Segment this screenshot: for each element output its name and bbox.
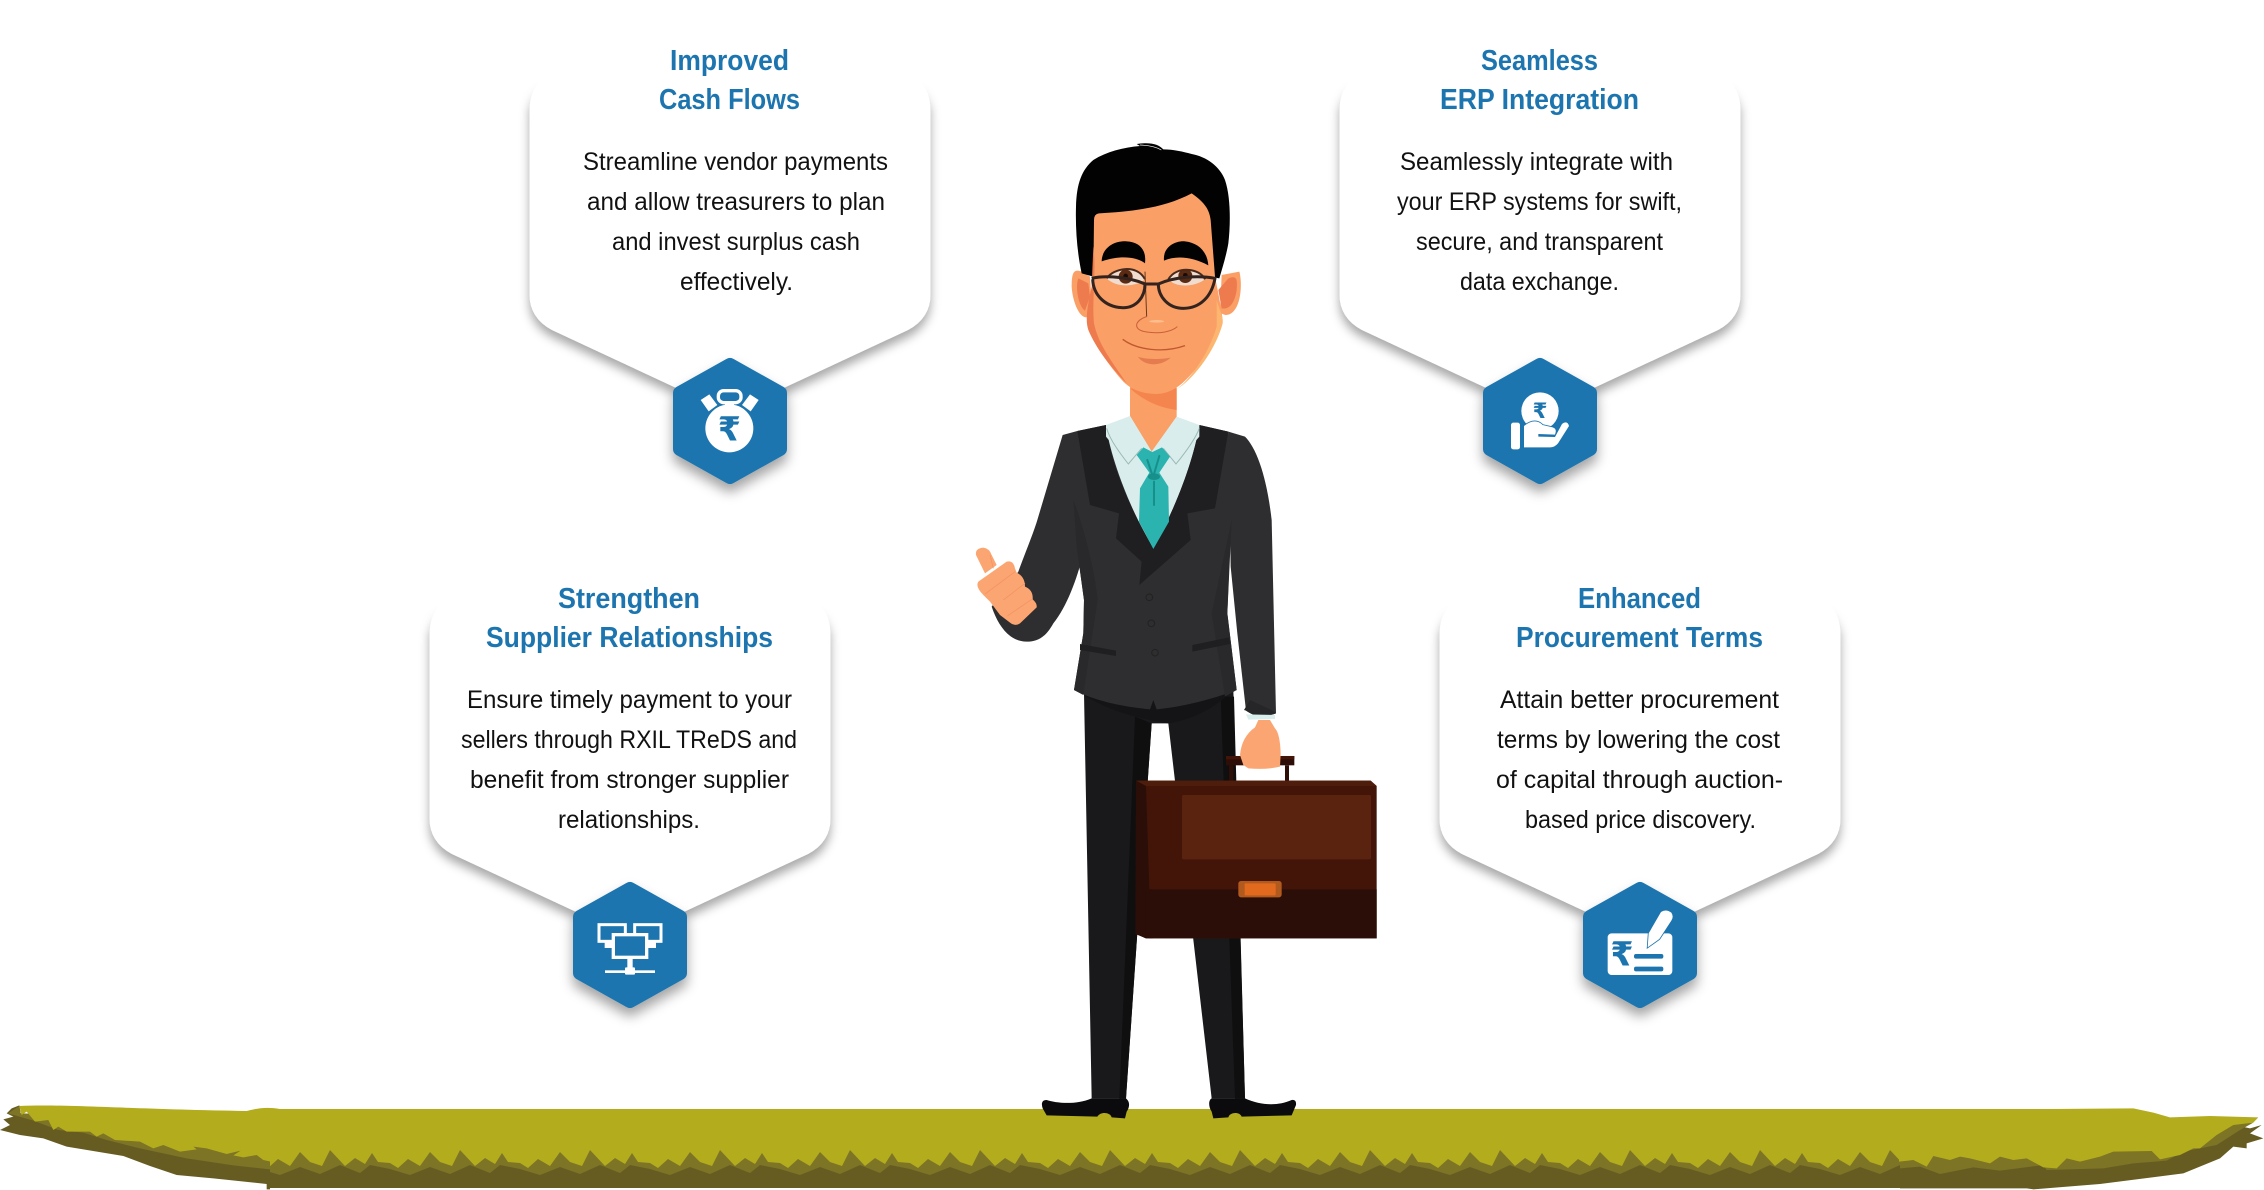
heading: [659, 45, 800, 116]
card shape: [1440, 596, 1840, 937]
icon hexagon: [1590, 889, 1690, 1001]
body text: [1397, 148, 1682, 296]
icon: stopwatch with rupee: [701, 391, 759, 452]
left ear: [1072, 271, 1092, 317]
eyebrows: [1102, 241, 1208, 265]
card shape: [530, 72, 930, 413]
icon hexagon: [580, 889, 680, 1001]
lapels: [1077, 425, 1228, 585]
body text: secure, and transparent: [1416, 228, 1663, 256]
heading: Supplier Relationships: [486, 622, 773, 654]
face shading: [1087, 247, 1223, 389]
thumbs-up hand: [976, 548, 1037, 625]
icon: networked computers: [599, 925, 661, 975]
body text: and invest surplus cash: [612, 228, 860, 256]
body text: Streamline vendor payments: [583, 148, 888, 176]
briefcase: [1136, 756, 1377, 938]
grass middle section: [267, 1109, 1907, 1188]
body text: terms by lowering the cost: [1497, 726, 1780, 754]
heading: Procurement Terms: [1516, 622, 1763, 654]
icon: signing a rupee cheque: ₹: [1610, 934, 1634, 973]
eyes: [1107, 269, 1205, 285]
body text: Seamlessly integrate with: [1400, 148, 1673, 176]
heading: [1516, 583, 1763, 654]
icon: stopwatch with rupee: ₹: [718, 410, 741, 449]
shirt cuff and hand on handle: [1240, 714, 1281, 769]
grass right end: [1899, 1108, 2263, 1189]
body text: and allow treasurers to plan: [587, 188, 885, 216]
body text: Ensure timely payment to your: [467, 686, 792, 714]
body text: sellers through RXIL TReDS and: [461, 726, 797, 754]
ground: grass strip: [0, 1105, 2263, 1189]
body text: based price discovery.: [1525, 806, 1756, 834]
glasses: [1092, 277, 1215, 308]
icon hexagon: [680, 365, 780, 477]
heading: Seamless: [1481, 45, 1598, 77]
heading: [486, 583, 773, 654]
body text: relationships.: [558, 806, 700, 834]
head: [1072, 143, 1241, 394]
nose: [1137, 272, 1177, 333]
icon: hand holding rupee coin: [1511, 392, 1569, 449]
right ear: [1218, 272, 1241, 315]
trousers: [1084, 690, 1245, 1098]
mouth: [1123, 339, 1185, 364]
heading: ERP Integration: [1440, 84, 1639, 116]
body text: benefit from stronger supplier: [470, 766, 789, 794]
body text: [461, 686, 797, 834]
body text: of capital through auction-: [1496, 766, 1783, 794]
panel: Seamless ERP Integration: [1325, 45, 1755, 477]
card shape: [430, 596, 830, 937]
jacket buttons and pockets: [1080, 594, 1230, 656]
body text: [583, 148, 888, 296]
grass left end: [0, 1105, 280, 1189]
character: businessman with briefcase: [976, 143, 1377, 1118]
tie: [1137, 447, 1170, 549]
neck: [1130, 383, 1177, 452]
heading: Improved: [670, 45, 789, 77]
face: [1087, 193, 1223, 394]
panel: Enhanced Procurement Terms: [1425, 574, 1855, 1001]
heading: [1440, 45, 1639, 116]
body text: Attain better procurement: [1500, 686, 1779, 714]
heading: Cash Flows: [659, 84, 800, 116]
panel: Improved Cash Flows: [515, 45, 945, 477]
body text: effectively.: [680, 268, 793, 296]
panel: Strengthen Supplier Relationships: [415, 574, 845, 1001]
heading: Enhanced: [1578, 583, 1701, 615]
body text: data exchange.: [1460, 268, 1619, 296]
icon: signing a rupee cheque: [1608, 910, 1673, 975]
collar: [1106, 416, 1199, 464]
icon hexagon: [1490, 365, 1590, 477]
body text: [1496, 686, 1783, 834]
shoes: [1042, 1098, 1296, 1118]
heading: Strengthen: [558, 583, 700, 615]
body text: your ERP systems for swift,: [1397, 188, 1682, 216]
jacket: [992, 425, 1276, 716]
hair: [1076, 143, 1230, 278]
shirt: [1106, 425, 1199, 548]
card shape: [1340, 72, 1740, 413]
icon: hand holding rupee coin: ₹: [1533, 399, 1547, 424]
